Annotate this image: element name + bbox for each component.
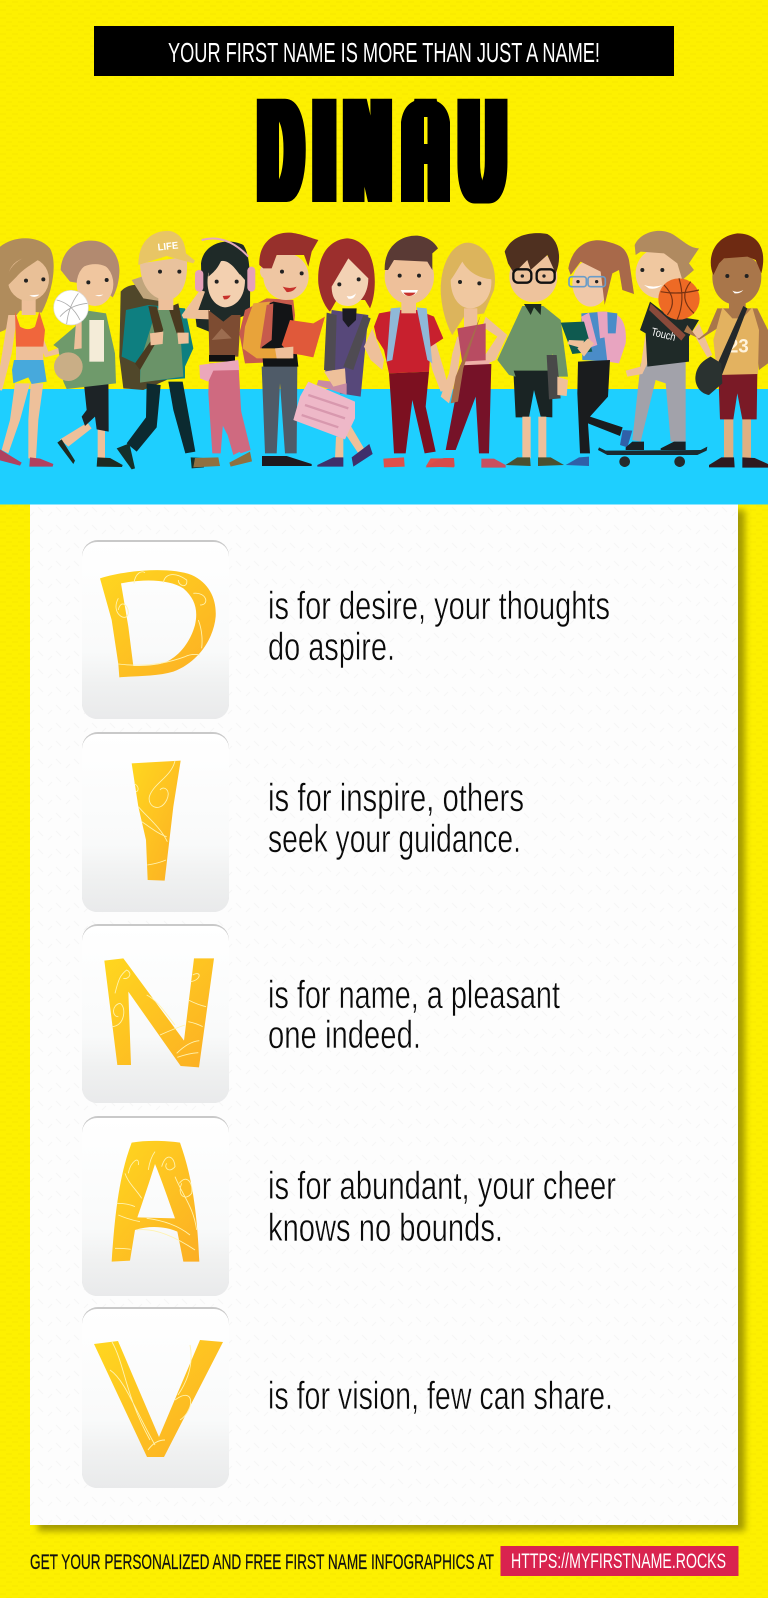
person 7: guy in red shirt with blue straps: [364, 236, 454, 467]
letter card I: [82, 732, 229, 912]
description N: is for name, a pleasant: [268, 974, 560, 1017]
title: name: I: [314, 67, 334, 234]
row: D: [82, 540, 610, 719]
person 3: guy with cap and backpack: [117, 231, 204, 469]
person 3: guy with cap and backpack: LIFE: [157, 241, 179, 254]
row: N: [82, 924, 560, 1103]
description D: do aspire.: [268, 626, 395, 669]
description A: is for abundant, your cheer: [268, 1165, 616, 1208]
person 5: guy reading orange book: [239, 233, 325, 466]
letter D: [100, 570, 216, 677]
title: name: U: [461, 68, 504, 235]
letter card V: [82, 1307, 229, 1488]
letter I: [132, 761, 181, 881]
description I: seek your guidance.: [268, 818, 521, 861]
description D: [268, 585, 610, 669]
letter A: [112, 1141, 199, 1262]
person 12: basketball player with tank top: [684, 233, 768, 468]
title: name: A: [408, 66, 443, 234]
description N: [268, 974, 560, 1057]
person 11: skateboarder with basketball: [598, 231, 712, 467]
person 10: girl with ponytail, tablet and pink backpack: [561, 240, 634, 466]
title: name: D: [260, 67, 301, 235]
person 9: guy with glasses and shorts: [497, 233, 568, 466]
person 4: girl with pink headphones: [182, 239, 255, 467]
description V: is for vision, few can share.: [268, 1375, 613, 1418]
title: name: [260, 66, 504, 235]
blue floor band: [0, 389, 768, 504]
title: name: N: [346, 68, 389, 235]
person 11: skateboarder with basketball: Touch: [650, 326, 677, 344]
people illustration: right half: [364, 231, 768, 468]
footer call to action: GET YOUR PERSONALIZED AND FREE FIRST NAME INFOGRAPHICS AT: [30, 1551, 494, 1574]
description A: knows no bounds.: [268, 1207, 503, 1250]
description D: is for desire, your thoughts: [268, 585, 610, 628]
person 2: girl in green jacket with volleyball: [53, 241, 123, 467]
person 6: red-haired girl with pink bag: [293, 238, 375, 467]
row: I: [82, 732, 524, 912]
letter V: [94, 1340, 223, 1457]
header banner: [94, 26, 674, 76]
letter card N: [82, 924, 229, 1103]
white content panel: [30, 504, 738, 1525]
description I: [268, 777, 524, 861]
letter card D: [82, 540, 229, 719]
person 8: blonde girl: [426, 243, 507, 468]
person 12: basketball player with tank top: 23: [728, 337, 749, 358]
row: V: [82, 1307, 613, 1488]
row: A: [82, 1116, 616, 1296]
person 1: girl in orange top: [0, 238, 81, 467]
letter N: [104, 958, 214, 1067]
letter card A: [82, 1116, 229, 1296]
description A: [268, 1165, 616, 1250]
people illustration: left half: [0, 231, 375, 469]
footer URL button: [500, 1546, 738, 1576]
description N: one indeed.: [268, 1014, 421, 1057]
description I: is for inspire, others: [268, 777, 524, 820]
panel shadow: [38, 510, 745, 1531]
